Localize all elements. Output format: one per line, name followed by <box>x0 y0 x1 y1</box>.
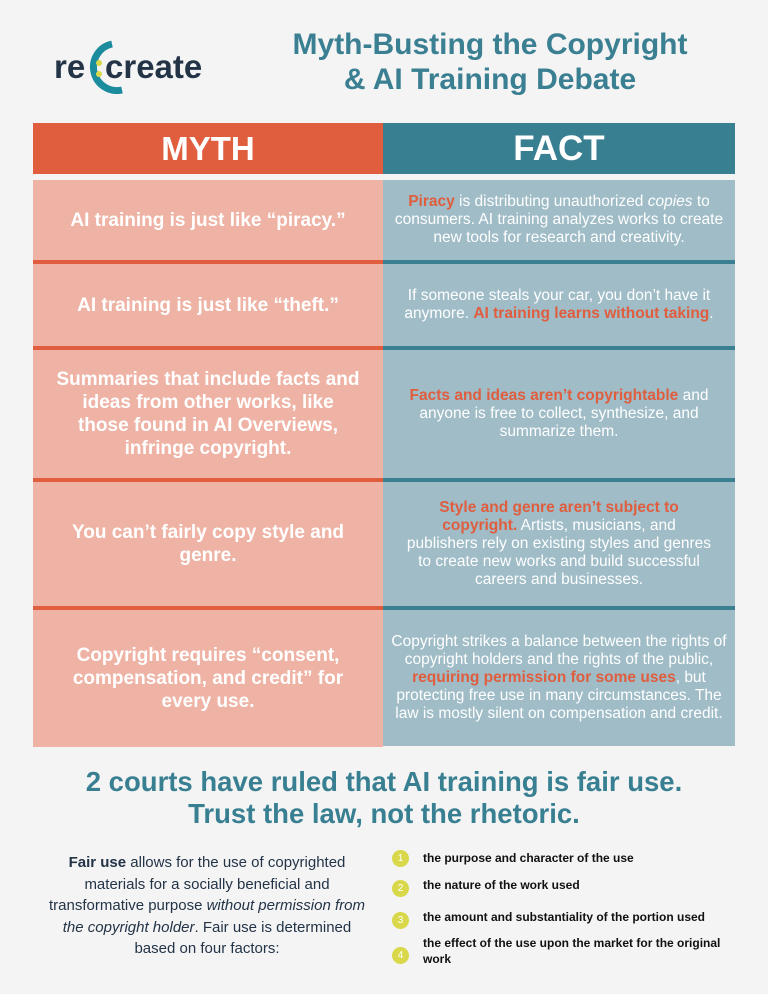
row 3 fact <box>383 350 735 478</box>
logo: re <box>54 48 85 85</box>
row 2 fact <box>383 264 735 346</box>
logo: create <box>105 48 202 85</box>
bottom heading: Trust the law, not the rhetoric. <box>188 798 580 829</box>
row 3 fact: Facts and ideas aren’t copyrightable and anyone is free to collect, synthesize, and summarize them. <box>410 387 708 440</box>
row 5 myth: Copyright requires “consent, compensation, and credit” for every use. <box>73 645 343 712</box>
fair use text: the copyright holder. Fair use is determined <box>63 918 351 936</box>
row 4 myth <box>33 482 383 606</box>
factor 2: the nature of the work used <box>423 878 580 892</box>
bottom heading: 2 courts have ruled that AI training is fair use. <box>86 766 682 797</box>
fair use text: Fair use allows for the use of copyrighted <box>69 854 345 871</box>
row 2 myth: AI training is just like “theft.” <box>77 294 339 316</box>
row 5 fact: Copyright strikes a balance between the rights of copyright holders and the rights of the public, requiring permission for some uses, but protecting free use in many circumstances. The law is mostly silent on compensation and credit. <box>391 633 727 722</box>
row 1 fact <box>383 180 735 260</box>
row 1 myth: AI training is just like “piracy.” <box>70 210 346 230</box>
row 4 fact: Style and genre aren’t subject to copyright. Artists, musicians, and publishers rely on existing styles and genres to create new works and build successful careers and businesses. <box>407 499 711 588</box>
factor 3 <box>392 910 705 929</box>
row 5 myth <box>33 610 383 747</box>
title <box>293 28 688 96</box>
row 4 fact <box>383 482 735 606</box>
factor 1: 1 <box>398 853 403 864</box>
header: fact: FACT <box>513 128 605 168</box>
row 3 myth: Summaries that include facts and <box>56 369 360 390</box>
title: Myth-Busting the Copyright <box>293 28 687 61</box>
row 2 fact: If someone steals your car, you don’t have it anymore. AI training learns without taking. <box>404 287 714 322</box>
row 3 myth: those found in AI Overviews, <box>78 415 338 436</box>
title: & AI Training Debate <box>344 63 636 96</box>
factor 4: 4 <box>398 950 403 961</box>
factor 3: 3 <box>398 915 403 926</box>
row 1 fact: Piracy is distributing unauthorized copies to consumers. AI training analyzes works to create new tools for research and creativity. <box>395 193 723 246</box>
factor 2 <box>392 878 580 897</box>
fair use text: based on four factors: <box>134 940 280 957</box>
row 5 fact <box>383 610 735 746</box>
factor 2: 2 <box>398 883 403 894</box>
fair use text <box>49 854 365 957</box>
fair use text: materials for a socially beneficial and <box>84 876 330 892</box>
row 3 myth <box>33 350 383 478</box>
factor 4: the effect of the use upon the market for the original work <box>423 936 720 966</box>
row 1 myth <box>33 180 383 260</box>
factor 3: the amount and substantiality of the portion used <box>423 910 705 924</box>
logo <box>54 40 202 94</box>
row 4 myth: You can’t fairly copy style and genre. <box>72 522 344 566</box>
row 3 myth: infringe copyright. <box>125 438 291 459</box>
fair use text: transformative purpose without permission from <box>49 897 365 914</box>
bottom heading <box>86 766 682 829</box>
header: fact <box>383 123 735 174</box>
factor 1: the purpose and character of the use <box>423 851 634 865</box>
header: myth: MYTH <box>161 130 255 166</box>
header: myth <box>33 123 383 174</box>
row 2 myth <box>33 264 383 346</box>
row 3 myth: ideas from other works, like <box>82 392 334 413</box>
